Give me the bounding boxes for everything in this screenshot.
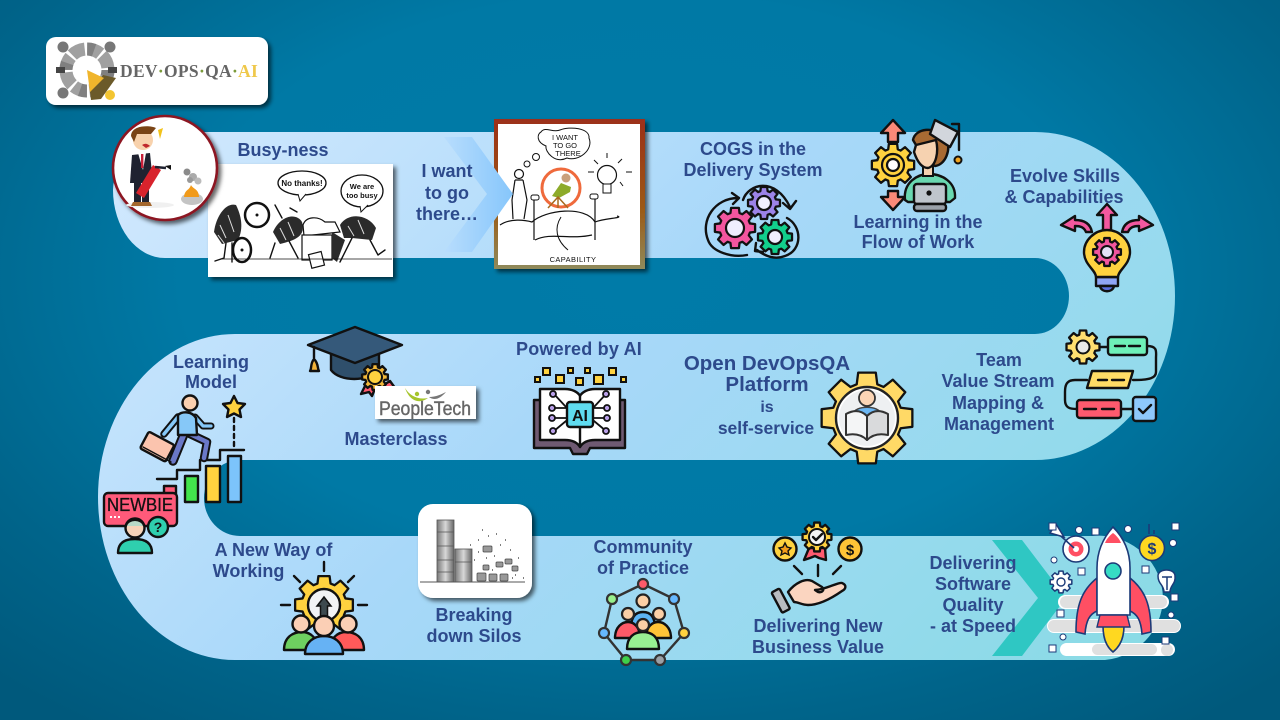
- text: Evolve Skills & Capabilities: Evolve Skills: [1010, 166, 1120, 186]
- chevron arrow: I want to go there: [444, 137, 513, 252]
- framed sketch: hamster wheel capability: THERE: [555, 149, 581, 158]
- text: Open DevOpsQA Platform is self-service: is: [760, 399, 774, 416]
- icon: AI book: [534, 368, 626, 454]
- chevron arrow: delivering quality: [992, 540, 1066, 656]
- icon: community of practice network: [599, 579, 689, 665]
- text: Delivering New Business Value: Business Value: [752, 637, 884, 657]
- cartoon: cavemen too busy: We are: [350, 182, 374, 191]
- icon: gear with person reading: [822, 373, 912, 463]
- icon: value stream flow: [1065, 331, 1156, 421]
- PeopleTech logo: [375, 386, 476, 420]
- image: crumbling silos: [418, 504, 532, 598]
- icon: bulb with arrows: [1061, 204, 1153, 291]
- text: Learning in the Flow of Work: Learning in the: [853, 212, 983, 232]
- text: Delivering New Business Value: Delivering New: [753, 616, 883, 636]
- circle: man with fire extinguisher: [113, 116, 217, 220]
- icon: learning in the flow of work: [872, 120, 962, 211]
- text: I want to go there: I want: [421, 161, 473, 181]
- text: Learning Model: Learning: [173, 352, 249, 372]
- Busy-ness heading: Busy-ness: [237, 140, 329, 160]
- text: I want to go there: there…: [416, 204, 478, 224]
- text: Delivering Software Quality at Speed: - at Speed: [930, 616, 1016, 636]
- icon: newbie sign with person: [104, 493, 177, 553]
- text: I want to go there: to go: [425, 183, 469, 203]
- icon: hand with reward coins: [771, 523, 862, 613]
- cartoon: cavemen too busy: too busy: [346, 191, 378, 200]
- text: COGS in the Delivery System: COGS in the: [700, 139, 806, 159]
- icon: rocket launch: $: [1148, 541, 1157, 558]
- logo: [46, 37, 268, 105]
- icon: AI book: AI: [572, 408, 588, 425]
- icon: newbie sign with person: NEWBIE: [107, 494, 173, 515]
- text: Learning in the Flow of Work: Flow of Work: [862, 232, 975, 252]
- PeopleTech logo: PeopleTech: [379, 398, 471, 420]
- text: Masterclass: Masterclass: [344, 429, 448, 449]
- text: Delivering Software Quality at Speed: Quality: [942, 595, 1004, 615]
- icon: gear with team: [281, 562, 367, 654]
- icon: newbie sign with person: ?: [154, 519, 162, 535]
- text: Open DevOpsQA Platform is self-service: Platform: [725, 373, 809, 396]
- icon: three cogs with rotation arrows: [706, 186, 798, 258]
- icon: hand with reward coins: $: [846, 542, 855, 559]
- text: A New Way of Working: Working: [213, 561, 284, 581]
- text: Delivering Software Quality at Speed: Software: [935, 574, 1011, 594]
- icon: rocket launch: [1047, 523, 1181, 656]
- logo: DEV·OPS·QA·AI: [120, 61, 258, 81]
- framed sketch: hamster wheel capability: TO GO: [553, 141, 577, 150]
- icon: person climbing bar-chart steps: [140, 396, 245, 502]
- text: COGS in the Delivery System: Delivery System: [683, 160, 823, 180]
- text: A New Way of Working: A New Way of: [215, 540, 332, 560]
- cartoon: cavemen too busy: [208, 164, 393, 277]
- cartoon: cavemen too busy: No thanks!: [281, 179, 323, 188]
- serpentine ribbon path: [98, 132, 1175, 660]
- text: Powered by AI: Powered by AI: [516, 339, 642, 359]
- text: Delivering Software Quality at Speed: Delivering: [929, 553, 1017, 573]
- text: Breaking down Silos: Breaking: [435, 605, 513, 625]
- framed sketch: hamster wheel capability: CAPABILITY: [550, 255, 596, 264]
- text: Open DevOpsQA Platform is self-service: self-service: [718, 418, 814, 438]
- text: Team Value Stream Mapping and Management: Mapping &: [952, 393, 1044, 413]
- text: Team Value Stream Mapping and Management: Value Stream: [941, 371, 1055, 391]
- text: Learning Model: Model: [185, 372, 237, 392]
- text: Community of Practice: of Practice: [597, 558, 689, 578]
- text: Evolve Skills & Capabilities: & Capabilities: [1004, 187, 1124, 207]
- text: Open DevOpsQA Platform is self-service: Open DevOpsQA: [684, 352, 850, 375]
- icon: graduation cap with rosette: [308, 327, 402, 396]
- text: Community of Practice: Community: [594, 537, 692, 557]
- text: Team Value Stream Mapping and Management: Team: [976, 350, 1022, 370]
- text: Team Value Stream Mapping and Management: Management: [944, 414, 1054, 434]
- framed sketch: hamster wheel capability: [494, 119, 645, 269]
- framed sketch: hamster wheel capability: I WANT: [552, 133, 578, 142]
- text: Breaking down Silos: down Silos: [426, 626, 522, 646]
